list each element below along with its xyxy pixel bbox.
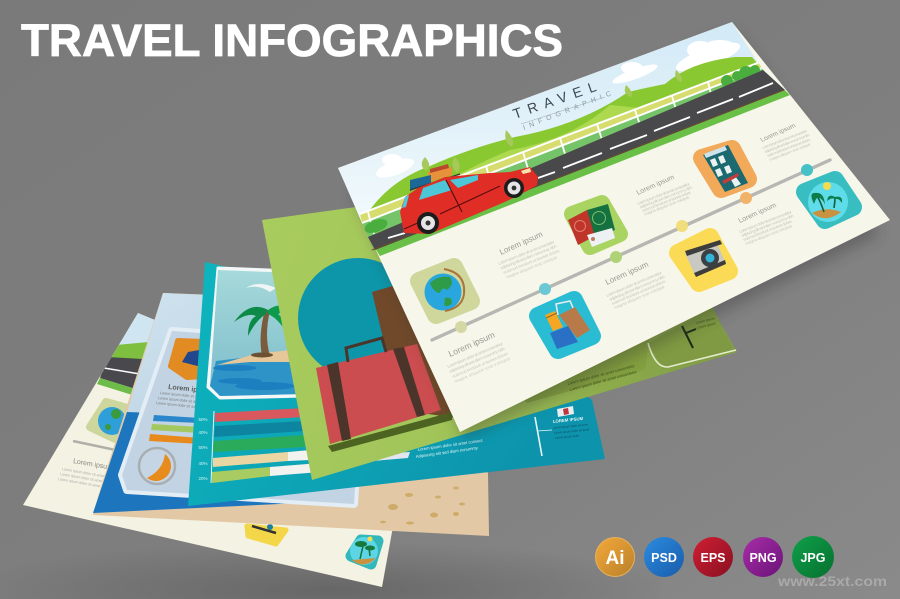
badges: file formats — [596, 536, 834, 578]
text: lorem ipsum on teal sheet with hotel mark — [553, 406, 590, 440]
sand background — [93, 293, 489, 536]
text: lorem ipsum block 5: Lorem ipsum — [737, 202, 778, 225]
text: lorem ipsum block 3: Lorem ipsum dolor sit amet consectetur — [605, 270, 663, 298]
text: lorem ipsum block 4: adipiscing elit sed diam nonummy nibh — [638, 185, 694, 209]
text: lorem ipsum block 2 — [497, 230, 561, 279]
chart: horizontal percentage bars: 50% — [198, 445, 208, 450]
header scene: sky, hills, fence — [338, 22, 763, 237]
badge: EPS: EPS — [700, 551, 726, 565]
luggage — [428, 167, 452, 182]
slide 3: teal chart sheet — [188, 262, 605, 506]
timeline dots — [455, 164, 813, 333]
text: lorem ipsum on teal sheet with hotel mark: Lorem ipsum dolor sit amet — [553, 422, 589, 430]
icon: passports tile — [568, 203, 620, 247]
panel: road corner with signpost: Lorem ipsum — [695, 316, 715, 325]
text: lorem ipsum block 3 — [604, 260, 667, 310]
icon: hotel tile — [702, 145, 748, 192]
text: lorem ipsum block 4: Lorem ipsum dolor sit amet consectetur — [636, 181, 691, 206]
icon: palm tree — [261, 310, 270, 356]
text: lorem ipsum back slide: Lorem ipsum dolor sit amet consectetur elit — [60, 472, 127, 488]
text: white caption on teal sheet: Adipiscing elit sed diam nonummy — [416, 445, 479, 459]
main title: TRAVEL INFOGRAPHICS — [21, 15, 563, 66]
text: lorem ipsum on teal sheet with hotel mark: Lorem ipsum dolor sit amet — [554, 427, 590, 435]
shrubs — [721, 65, 760, 87]
timeline bar — [73, 441, 125, 452]
text: lorem ipsum block 1: euismod tincidunt ut laoreet dolore — [451, 351, 509, 379]
text: lorem ipsum back slide: Lorem ipsum — [73, 458, 113, 472]
icon: small globe — [90, 402, 135, 444]
text: lorem ipsum block 5: euismod tincidunt ut laoreet dolore — [742, 219, 794, 242]
text: lorem ipsum block 2: Lorem ipsum dolor sit amet consectetur — [497, 239, 556, 266]
shadow of front slide — [350, 30, 880, 440]
text: lorem ipsum block 3: Lorem ipsum — [604, 260, 650, 287]
icon: red suitcase — [316, 338, 452, 452]
panel: dark green text box: Lorem ipsum dolor sit amet consectetur — [569, 369, 638, 392]
chart: horizontal percentage bars: 50% — [198, 417, 208, 422]
text: lorem ipsum back slide: Lorem ipsum dolor sit amet consectetur — [58, 477, 120, 492]
text: lorem ipsum block 6: Lorem ipsum — [759, 122, 797, 144]
title: travel infographic: TRAVEL — [511, 78, 598, 122]
text: lorem ipsum block 2: magna aliquam erat volutpat — [505, 255, 558, 279]
text: lorem ipsum on teal sheet with hotel mark: Lorem ipsum dolor — [555, 434, 579, 440]
text: lorem ipsum block 3: adipiscing elit sed diam nonummy nibh — [608, 274, 666, 302]
icon: red car with luggage — [400, 164, 538, 234]
text: lorem ipsum block 4 — [636, 174, 694, 216]
icon: small camera — [247, 524, 286, 544]
text: lorem ipsum block 6: adipiscing elit sed diam nonummy nibh — [763, 132, 811, 154]
trees — [422, 70, 682, 173]
badge: JPG: JPG — [800, 551, 826, 565]
text: lorem ipsum block 6: Lorem ipsum dolor sit amet consectetur — [761, 128, 809, 150]
photo panel: palm island — [208, 268, 320, 398]
text: lorem ipsum on teal sheet with hotel mark: LOREM IPSUM — [553, 416, 584, 424]
chart: horizontal percentage bars — [198, 408, 410, 483]
text: lorem ipsum block 1: magna aliquam erat volutpat — [453, 356, 511, 384]
panel: dark green text box: Lorem ipsum dolor sit amet consectetur — [567, 363, 636, 386]
slide 4: blue and sand beach sheet — [93, 293, 489, 536]
text: lorem ipsum block 5: adipiscing elit sed diam nonummy nibh — [740, 213, 795, 238]
panel: road corner with signpost — [648, 308, 736, 369]
text: lorem ipsum block 5 — [737, 202, 795, 246]
text: white caption on teal sheet — [416, 438, 484, 459]
panel: front travel timeline slide — [338, 22, 890, 432]
text: lorem ipsum on blue sheet — [156, 384, 223, 409]
text: lorem ipsum block 3: magna aliquam erat volutpat — [613, 284, 666, 310]
text: lorem ipsum block 2: Lorem ipsum — [498, 230, 544, 257]
text: lorem ipsum block 1 — [446, 330, 511, 384]
chart: horizontal percentage bars: 40% — [198, 430, 208, 435]
timeline: white vertical line — [535, 417, 552, 456]
text: lorem ipsum block 6: magna aliquam erat volutpat — [768, 142, 812, 162]
icon: orange car tile — [171, 341, 205, 377]
text: lorem ipsum back slide: Lorem ipsum dolor sit amet consectetur elit — [62, 467, 129, 483]
icon: brown suitcase — [372, 278, 470, 420]
badge: PNG: PNG — [749, 551, 777, 565]
text: lorem ipsum block 5: Lorem ipsum dolor sit amet consectetur — [738, 209, 793, 234]
icon: teal globe — [298, 258, 418, 378]
sky panel — [127, 293, 320, 420]
sand pebbles — [380, 486, 465, 524]
badge: PNG — [743, 537, 783, 577]
text: white caption on teal sheet: Lorem ipsum dolor sit amet consect — [418, 438, 484, 452]
wheels — [417, 178, 524, 234]
panel: dark green text box — [520, 340, 649, 403]
text: lorem ipsum block 1: Lorem ipsum — [447, 330, 496, 359]
icon: island and sea — [210, 352, 300, 396]
icon: small beach — [350, 536, 378, 565]
slide 5: cream timeline sheet at the back — [23, 313, 420, 587]
text: lorem ipsum on blue sheet: Lorem ipsum dolor sit amet — [156, 401, 199, 409]
body — [400, 167, 538, 234]
badge: EPS — [693, 537, 733, 577]
chart: horizontal percentage bars: 20% — [198, 476, 208, 481]
slide 2: green suitcase sheet — [262, 190, 737, 480]
road — [368, 70, 790, 256]
chart: small bars — [149, 415, 200, 444]
chart: horizontal percentage bars: 40% — [198, 461, 208, 466]
badge: JPG — [792, 536, 834, 578]
badge: PSD — [644, 537, 684, 577]
text: lorem ipsum on blue sheet: Lorem ipsum dolor sit amet consectetur — [158, 396, 221, 406]
rounded info panel — [122, 331, 358, 504]
chart: orange pie — [139, 448, 175, 484]
text: lorem ipsum block 2: adipiscing elit sed diam nonummy nibh — [499, 243, 558, 270]
blue band — [93, 412, 300, 513]
fence — [360, 62, 762, 223]
icon: globe — [419, 267, 471, 315]
text: lorem ipsum block 3: euismod tincidunt ut laoreet dolore — [611, 279, 667, 306]
text: lorem ipsum on blue sheet: Lorem ipsum — [168, 384, 212, 395]
text: lorem ipsum block 4: euismod tincidunt ut laoreet dolore — [641, 190, 692, 213]
icon: camera tile — [678, 237, 729, 283]
text: lorem ipsum block 1: adipiscing elit sed diam nonummy nibh — [448, 346, 506, 374]
icon: luggage tile — [538, 300, 592, 350]
text: lorem ipsum back slide — [58, 458, 129, 492]
watermark: www.25xt.com — [777, 573, 887, 589]
badge: Ai: Ai — [606, 548, 624, 569]
title: travel infographic: INFOGRAPHIC — [522, 90, 612, 132]
text: lorem ipsum block 4: magna aliquam erat volutpat — [643, 194, 691, 216]
text: lorem ipsum block 6: euismod tincidunt ut laoreet dolore — [766, 137, 812, 158]
text: lorem ipsum on blue sheet: Lorem ipsum dolor sit amet consectetur — [160, 391, 223, 401]
icon: beach tile — [805, 180, 853, 222]
panel: road corner with signpost: Lorem ipsum — [696, 321, 716, 330]
badge: PSD: PSD — [651, 551, 677, 565]
badge: Ai — [596, 538, 634, 576]
text: lorem ipsum block 4: Lorem ipsum — [636, 174, 676, 197]
text: lorem ipsum block 6 — [759, 122, 812, 162]
text: lorem ipsum block 5: magna aliquam erat volutpat — [744, 223, 794, 246]
timeline bar — [432, 160, 830, 340]
windows — [419, 180, 452, 200]
text: lorem ipsum block 2: euismod tincidunt ut laoreet dolore — [502, 248, 561, 275]
text: lorem ipsum block 1: Lorem ipsum dolor sit amet consectetur — [446, 341, 504, 369]
